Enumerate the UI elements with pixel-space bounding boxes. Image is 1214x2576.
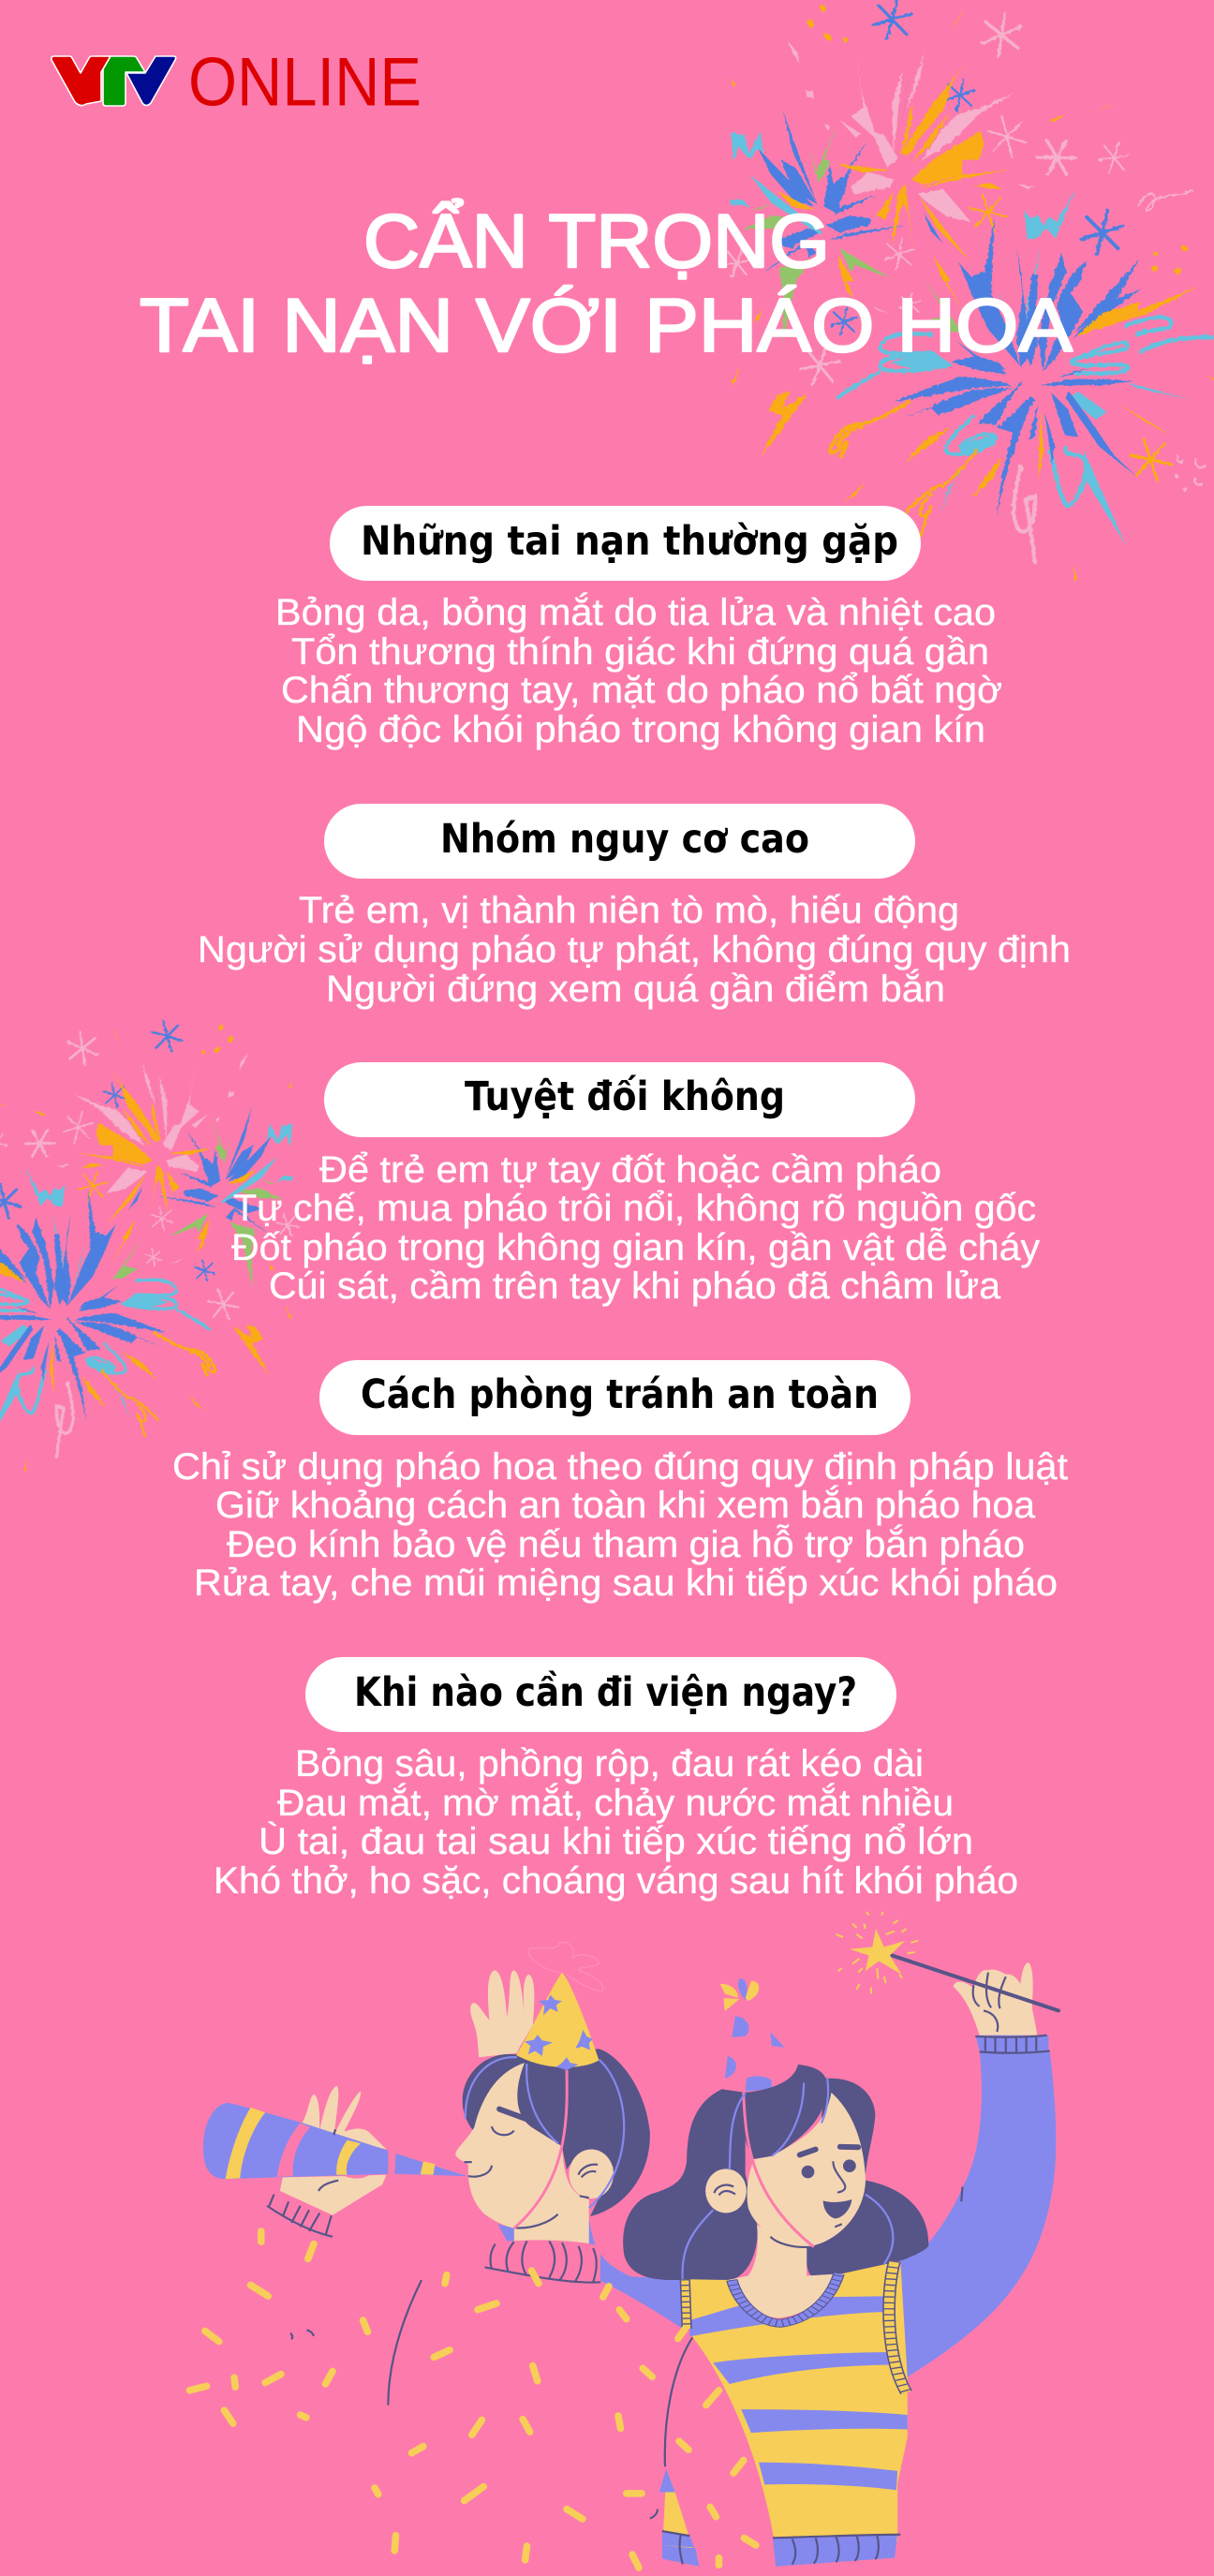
section heading: high risk group: Nhóm nguy cơ cao <box>440 816 809 863</box>
fireworks: top right <box>720 0 1214 581</box>
text block: high risk group: Người sử dụng pháo tự phát, không đúng quy định <box>198 929 1071 970</box>
text block: common accidents: Bỏng da, bỏng mắt do tia lửa và nhiệt cao <box>275 591 996 633</box>
sparkler <box>836 1912 1059 2010</box>
text block: never do: Tự chế, mua pháo trôi nổi, không rõ nguồn gốc <box>233 1188 1036 1229</box>
girl: facial features <box>683 2079 893 2280</box>
text block: never do: Để trẻ em tự tay đốt hoặc cầm pháo <box>319 1149 941 1191</box>
man: face and neck <box>455 2063 614 2248</box>
text block: when to go to hospital: Đau mắt, mờ mắt, chảy nước mắt nhiều <box>277 1782 954 1824</box>
text block: high risk group <box>198 890 1071 1010</box>
text block: common accidents: Tổn thương thính giác khi đứng quá gần <box>291 631 989 673</box>
girl: face and chest <box>705 2093 866 2318</box>
text block: when to go to hospital: Ù tai, đau tai sau khi tiếp xúc tiếng nổ lớn <box>259 1820 973 1862</box>
text block: high risk group: Trẻ em, vị thành niên tò mò, hiếu động <box>299 890 959 931</box>
text block: prevention: Chỉ sử dụng pháo hoa theo đúng quy định pháp luật <box>172 1446 1068 1488</box>
section heading: never do: Tuyệt đối không <box>465 1073 785 1120</box>
girl: hair <box>623 2065 928 2280</box>
text block: high risk group: Người đứng xem quá gần điểm bắn <box>326 968 945 1010</box>
man: collar <box>485 2240 600 2283</box>
title: TAI NẠN VỚI PHÁO HOA <box>140 284 1073 368</box>
confetti <box>189 2231 756 2568</box>
girl: hat pieces <box>720 1978 785 2091</box>
text block: common accidents: Ngộ độc khói pháo trong không gian kín <box>296 709 985 750</box>
man: facial features <box>465 2057 624 2241</box>
title <box>140 199 1073 368</box>
fireworks: left side <box>0 1017 301 1472</box>
title: CẨN TRỌNG <box>363 199 830 284</box>
logo: VTV Online <box>52 45 422 120</box>
girl: raised hand <box>954 1962 1038 2036</box>
text block: never do: Cúi sát, cầm trên tay khi pháo đã châm lửa <box>269 1266 1001 1307</box>
text block: common accidents <box>275 591 1002 750</box>
section heading: high risk group <box>324 804 915 879</box>
girl: striped vest <box>659 2261 908 2567</box>
section heading: prevention: Cách phòng tránh an toàn <box>361 1371 879 1418</box>
logo mark <box>52 56 176 106</box>
girl: sleeve cuff <box>973 1973 1050 2053</box>
man: hair <box>463 2049 650 2216</box>
party horn and hand <box>203 2086 467 2237</box>
text block: prevention: Đeo kính bảo vệ nếu tham gia hỗ trợ bắn pháo <box>227 1523 1025 1565</box>
text block: never do <box>231 1149 1040 1307</box>
text block: common accidents: Chấn thương tay, mặt do pháo nổ bất ngờ <box>281 670 1002 711</box>
man: body outline <box>290 2186 963 2519</box>
section heading: never do <box>324 1062 915 1137</box>
section heading: prevention <box>319 1360 910 1435</box>
section heading: common accidents <box>330 506 921 581</box>
text block: when to go to hospital: Khó thở, ho sặc, choáng váng sau hít khói pháo <box>214 1860 1018 1902</box>
text block: when to go to hospital: Bỏng sâu, phồng rộp, đau rát kéo dài <box>295 1743 924 1784</box>
text block: prevention: Giữ khoảng cách an toàn khi xem bắn pháo hoa <box>215 1484 1036 1526</box>
logo wordmark: ONLINE <box>188 45 422 120</box>
text block: prevention: Rửa tay, che mũi miệng sau khi tiếp xúc khói pháo <box>194 1562 1058 1604</box>
section heading: common accidents: Những tai nạn thường gặp <box>361 518 898 565</box>
text block: prevention <box>172 1446 1068 1604</box>
man: raised hand <box>470 1970 534 2057</box>
section heading: when to go to hospital <box>305 1657 896 1732</box>
section heading: when to go to hospital: Khi nào cần đi viện ngay? <box>354 1669 857 1716</box>
man: party hat <box>516 1943 603 2070</box>
text block: when to go to hospital <box>214 1743 1018 1902</box>
text block: never do: Đốt pháo trong không gian kín, gần vật dễ cháy <box>231 1226 1040 1268</box>
girl: arms <box>587 2036 1056 2377</box>
illustration: two people celebrating <box>189 1912 1059 2568</box>
